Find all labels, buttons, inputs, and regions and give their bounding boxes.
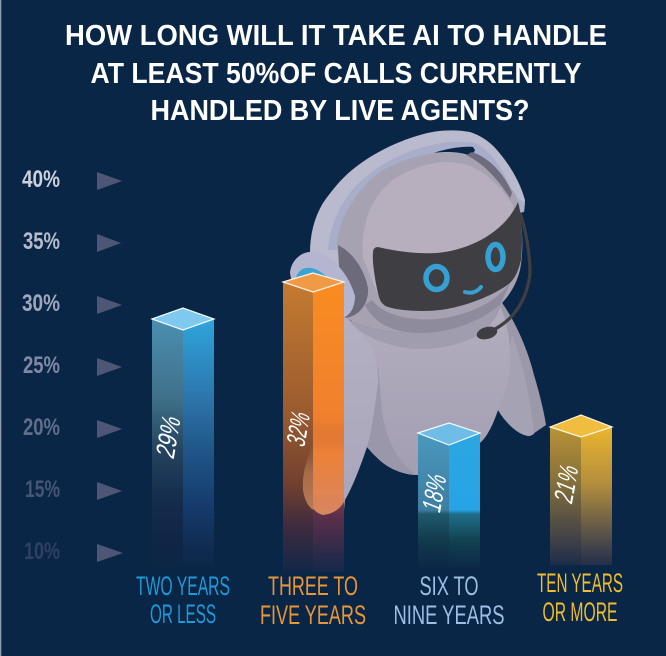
- robot illustration: [290, 130, 546, 510]
- bar: ten years or more: [548, 415, 612, 565]
- category label: three to five years: [260, 571, 366, 630]
- title: [65, 20, 607, 127]
- robot right arm: [480, 300, 546, 436]
- robot right eye: [488, 244, 503, 270]
- bar: three to five years: [281, 273, 345, 572]
- robot headband inner ridge: [328, 142, 525, 250]
- category label: three to five years: FIVE YEARS: [260, 600, 366, 630]
- robot left eye: [426, 266, 447, 290]
- category label: six to nine years: SIX TO: [420, 571, 478, 601]
- value: 32%: 32%: [281, 406, 315, 451]
- robot headband gap: [434, 147, 475, 156]
- value: 21%: 21%: [548, 459, 584, 507]
- robot left ear pad: [290, 252, 355, 317]
- robot smile: [465, 287, 481, 293]
- robot torso: [345, 305, 510, 475]
- title: HOW LONG WILL IT TAKE AI TO HANDLE: [65, 20, 607, 52]
- robot collar outer: [350, 300, 503, 349]
- robot right arm highlight: [498, 335, 534, 436]
- robot head highlight: [363, 162, 518, 300]
- robot torso left shading: [367, 365, 417, 475]
- robot left ear dark crescent: [338, 245, 368, 318]
- value: 29%: 29%: [150, 410, 186, 462]
- robot headband: [310, 130, 525, 270]
- category label: three to five years: THREE TO: [268, 571, 358, 601]
- title: AT LEAST 50%OF CALLS CURRENTLY: [90, 58, 582, 90]
- y axis labels: 25%: [23, 352, 60, 379]
- robot ear ring: [296, 268, 326, 284]
- value: 18%: 18%: [416, 468, 452, 516]
- category label: two years or less: OR LESS: [150, 599, 216, 629]
- category label: six to nine years: [394, 571, 504, 630]
- robot head: [337, 152, 522, 333]
- robot chin shade: [365, 283, 510, 333]
- category label: two years or less: [136, 571, 230, 629]
- robot head band strip: [466, 152, 512, 198]
- y axis arrows: [97, 172, 123, 562]
- bar: six to nine years: [416, 423, 480, 568]
- y axis labels: [22, 166, 60, 565]
- category label: six to nine years: NINE YEARS: [394, 600, 504, 630]
- category label: ten years or more: [537, 568, 623, 627]
- robot microphone: [490, 213, 530, 332]
- title: HANDLED BY LIVE AGENTS?: [150, 95, 530, 127]
- y axis labels: 35%: [23, 228, 60, 255]
- y axis labels: 40%: [22, 166, 60, 193]
- bar: two years or less: [150, 308, 214, 566]
- robot left arm: [300, 312, 378, 510]
- y axis labels: 10%: [24, 538, 60, 565]
- y axis labels: 30%: [22, 290, 60, 317]
- y axis labels: 20%: [23, 414, 60, 441]
- robot collar inner: [347, 295, 497, 333]
- y axis labels: 15%: [25, 476, 60, 503]
- category label: two years or less: TWO YEARS: [136, 571, 230, 601]
- robot visor: [373, 202, 522, 311]
